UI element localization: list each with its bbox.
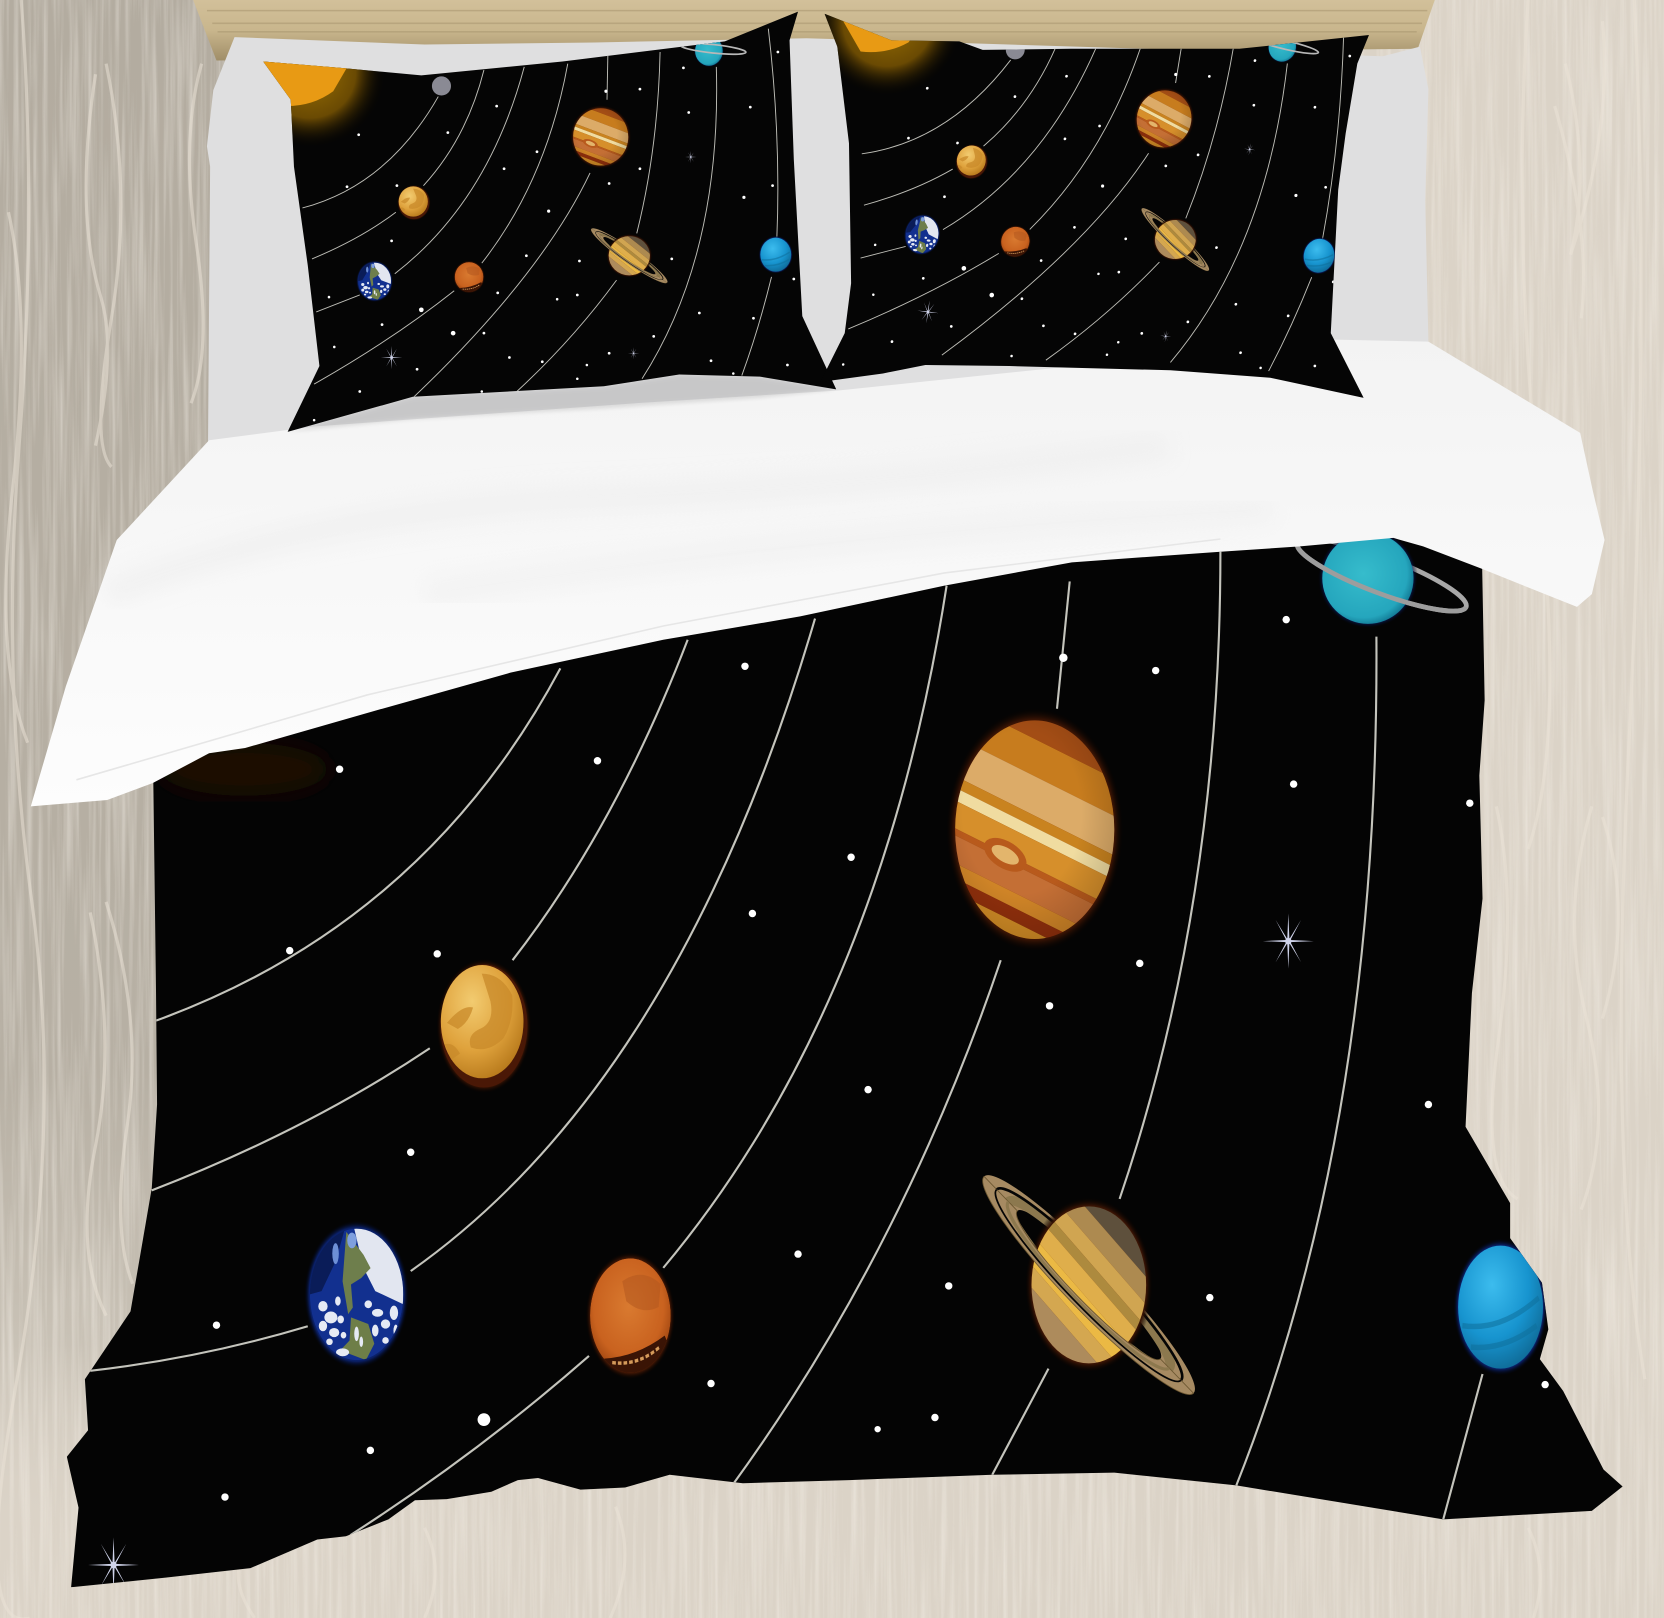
sparkle star right: [1263, 914, 1314, 969]
planet: Mars: [585, 1251, 676, 1380]
sparkle star bottom left: [88, 1538, 138, 1584]
left pillow: [263, 12, 836, 432]
duvet printed with the solar system: [66, 538, 1622, 1588]
planet: Neptune: [1453, 1238, 1548, 1376]
duvet sun glow: [159, 743, 329, 796]
gray fitted sheet: [207, 37, 1428, 446]
planet: Saturn with rings: [982, 1175, 1195, 1395]
planet: Venus: [436, 958, 532, 1094]
planet: Earth: [304, 1220, 409, 1369]
planet: Jupiter: [950, 712, 1120, 947]
stars: [213, 616, 1549, 1501]
planet: Uranus with ring: [1295, 538, 1469, 626]
right pillow: [824, 14, 1369, 398]
orbit lines: [90, 552, 1483, 1535]
headboard: [193, 0, 1435, 60]
white duvet fold: [31, 340, 1605, 806]
